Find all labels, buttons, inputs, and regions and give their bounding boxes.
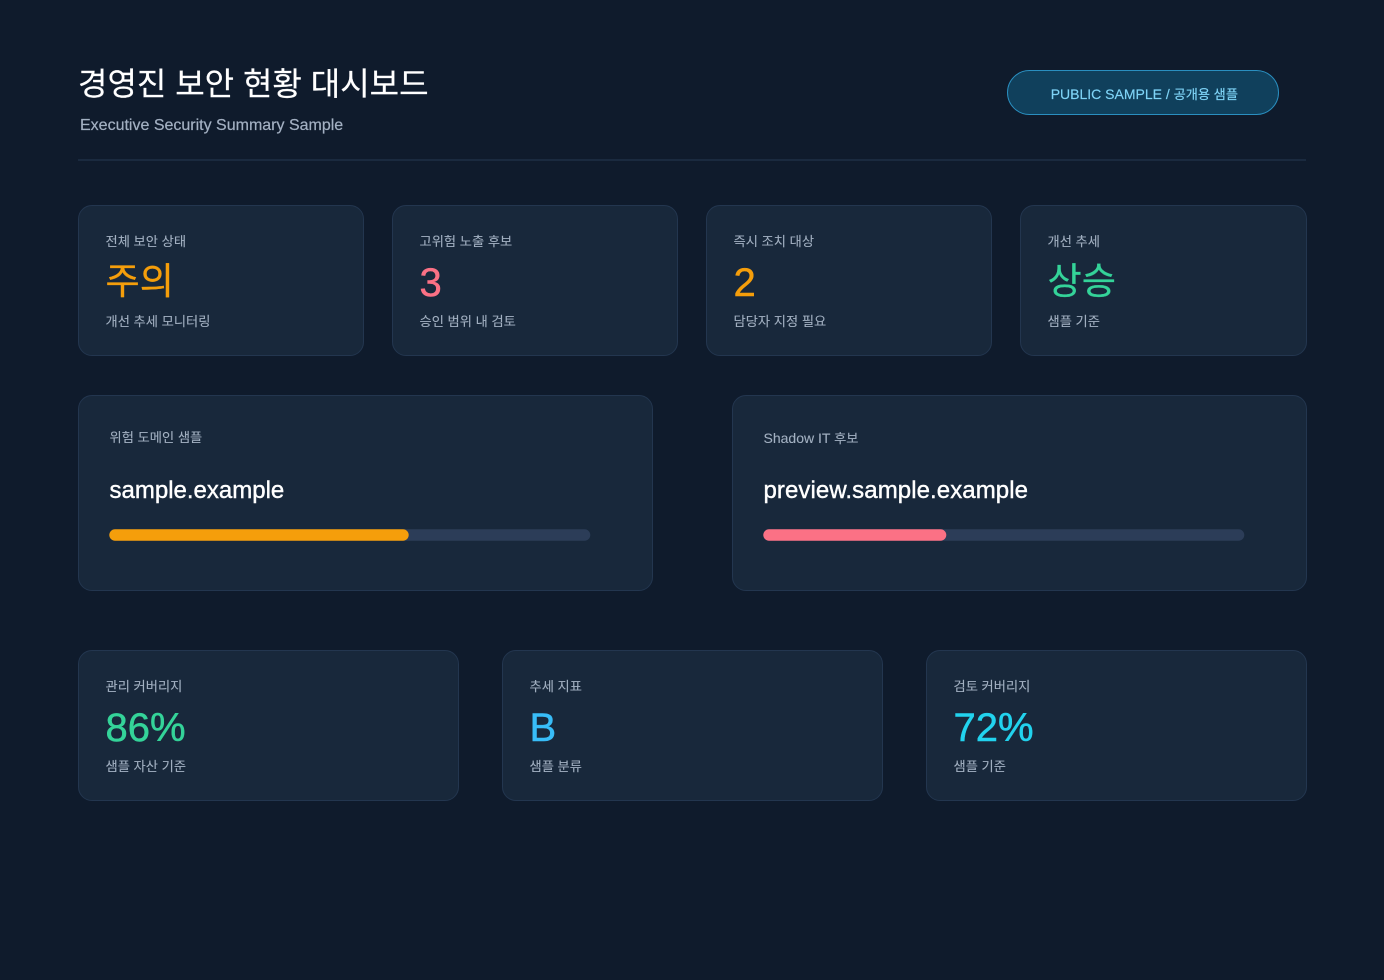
progress bar	[109, 529, 590, 541]
panel: improvement trend	[1020, 204, 1306, 356]
progress bar	[763, 529, 1244, 541]
panel: risky domain sample	[78, 394, 652, 590]
note: 샘플 분류	[530, 759, 582, 774]
panel: overall security status	[78, 204, 364, 356]
value: 86%	[106, 706, 186, 750]
panel: managed coverage	[78, 650, 458, 800]
label: 위험 도메인 샘플	[110, 430, 202, 445]
note: 개선 추세 모니터링	[106, 314, 210, 329]
note: 샘플 기준	[1048, 314, 1100, 329]
panel: immediate action targets	[706, 204, 992, 356]
value: B	[530, 706, 556, 750]
note: 샘플 기준	[954, 759, 1006, 774]
domain: sample.example	[110, 476, 284, 504]
panel: high risk exposure candidates	[392, 204, 678, 356]
label: 전체 보안 상태	[106, 234, 186, 249]
subtitle: Executive Security Summary Sample	[80, 116, 343, 134]
value: 상승	[1048, 260, 1116, 302]
note: 샘플 자산 기준	[106, 759, 186, 774]
label: 관리 커버리지	[106, 679, 182, 694]
value: 72%	[954, 706, 1034, 750]
label: Shadow IT 후보	[764, 430, 858, 446]
label: 검토 커버리지	[954, 679, 1030, 694]
badge: public sample	[1007, 70, 1279, 114]
note: 승인 범위 내 검토	[420, 314, 516, 329]
note: 담당자 지정 필요	[734, 314, 826, 329]
label: 추세 지표	[530, 679, 582, 694]
domain: preview.sample.example	[764, 476, 1028, 504]
title: 경영진 보안 현황 대시보드	[78, 66, 429, 102]
value: 2	[734, 261, 756, 305]
badge: public sample: PUBLIC SAMPLE / 공개용 샘플	[1051, 86, 1238, 102]
panel: shadow IT candidates	[732, 394, 1306, 590]
panel: review coverage	[926, 650, 1306, 800]
label: 개선 추세	[1048, 234, 1100, 249]
label: 즉시 조치 대상	[734, 234, 814, 249]
value: 주의	[106, 260, 174, 302]
label: 고위험 노출 후보	[420, 234, 512, 249]
panel: trend indicator	[502, 650, 882, 800]
value: 3	[420, 261, 442, 305]
